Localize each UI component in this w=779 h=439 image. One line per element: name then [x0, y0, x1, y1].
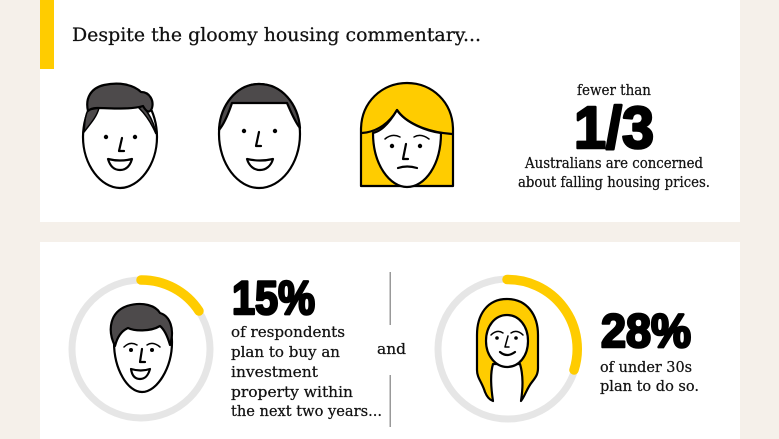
statistic: fewer than one third: fewer than [577, 81, 651, 99]
statistic: 15 percent: investment [231, 363, 318, 381]
icon: smiling woman with long yellow hair [477, 299, 538, 401]
statistic: fewer than one third: Australians are concerned [524, 154, 703, 172]
statistic: 15 percent: of respondents [231, 323, 345, 341]
statistic: fewer than one third [518, 81, 710, 191]
divider with "and": and [377, 340, 406, 358]
heading: Despite the gloomy housing commentary... [72, 24, 481, 46]
statistic: 28 percent: 28% [601, 304, 691, 357]
icon: smiling man in ring [111, 304, 172, 392]
accent bar [40, 0, 54, 69]
statistic: 28 percent: of under 30s [600, 358, 692, 376]
statistic: 28 percent: plan to do so. [600, 377, 699, 395]
icon: smiling man with short hair [219, 84, 300, 188]
statistic: 28 percent [600, 304, 699, 395]
statistic: 15 percent: plan to buy an [231, 343, 340, 361]
statistic: 15 percent: property within [231, 383, 353, 401]
statistic: fewer than one third: about falling housing prices. [518, 173, 710, 191]
panel: fewer than one third concerned [40, 0, 740, 222]
panel: investment property intentions [40, 242, 740, 439]
ring chart: 15 percent [72, 280, 210, 418]
icon: frowning woman with yellow hair [361, 83, 453, 187]
statistic: 15 percent: 15% [232, 271, 315, 324]
statistic: fewer than one third: 1/3 [574, 95, 654, 161]
icon: smiling man with swept hair [83, 84, 157, 188]
statistic: 15 percent: the next two years... [231, 402, 382, 420]
statistic: 15 percent [231, 271, 382, 420]
ring chart: 28 percent [438, 279, 578, 419]
